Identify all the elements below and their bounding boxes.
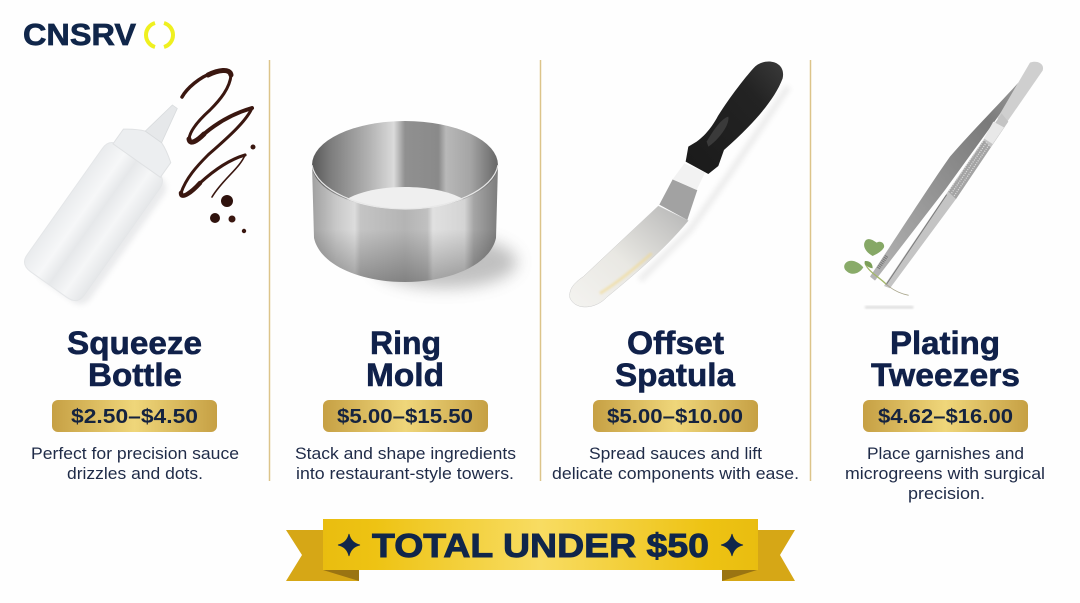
description: Perfect for precision sauce [31,445,239,463]
panel: offset spatula [552,62,799,483]
price badge [52,400,217,432]
heading: Plating [890,325,1000,361]
icon: right star [721,534,743,556]
description: microgreens with surgical [845,465,1045,483]
description: delicate components with ease. [552,465,799,483]
panel: ring mold [295,121,517,483]
price badge: $4.62–$16.00 [878,406,1013,428]
description [552,445,799,483]
heading: Mold [366,357,444,393]
price badge: $5.00–$15.50 [337,406,473,428]
heading: Spatula [615,357,735,393]
heading [871,325,1020,393]
heading [67,325,202,393]
panel: squeeze bottle [20,70,256,483]
description: precision. [908,485,985,503]
heading: Squeeze [67,325,202,361]
price badge: $2.50–$4.50 [71,406,198,428]
description: Place garnishes and [867,445,1024,463]
icon: ring mold [312,121,517,288]
panel: plating tweezers [844,62,1045,503]
icon: offset spatula [570,62,788,307]
icon: plating tweezers [844,62,1043,309]
description [845,445,1045,503]
price badge [863,400,1028,432]
banner: total under $50 [286,519,795,581]
icon: chocolate drizzle [181,70,256,233]
icon: squeeze bottle [20,86,209,309]
heading: Offset [627,325,724,361]
description: Spread sauces and lift [589,445,762,463]
heading [615,325,735,393]
description: into restaurant-style towers. [296,465,514,483]
description: Stack and shape ingredients [295,445,516,463]
icon: left star [338,534,360,556]
heading: Bottle [88,357,182,393]
description [31,445,239,483]
description [295,445,516,483]
heading: Tweezers [871,357,1020,393]
heading [366,325,444,393]
banner: total under $50: TOTAL UNDER $50 [372,528,709,565]
price badge [593,400,758,432]
heading: Ring [370,325,441,361]
price badge [323,400,488,432]
price badge: $5.00–$10.00 [607,406,743,428]
logo: CNSRV [23,17,136,52]
description: drizzles and dots. [67,465,203,483]
